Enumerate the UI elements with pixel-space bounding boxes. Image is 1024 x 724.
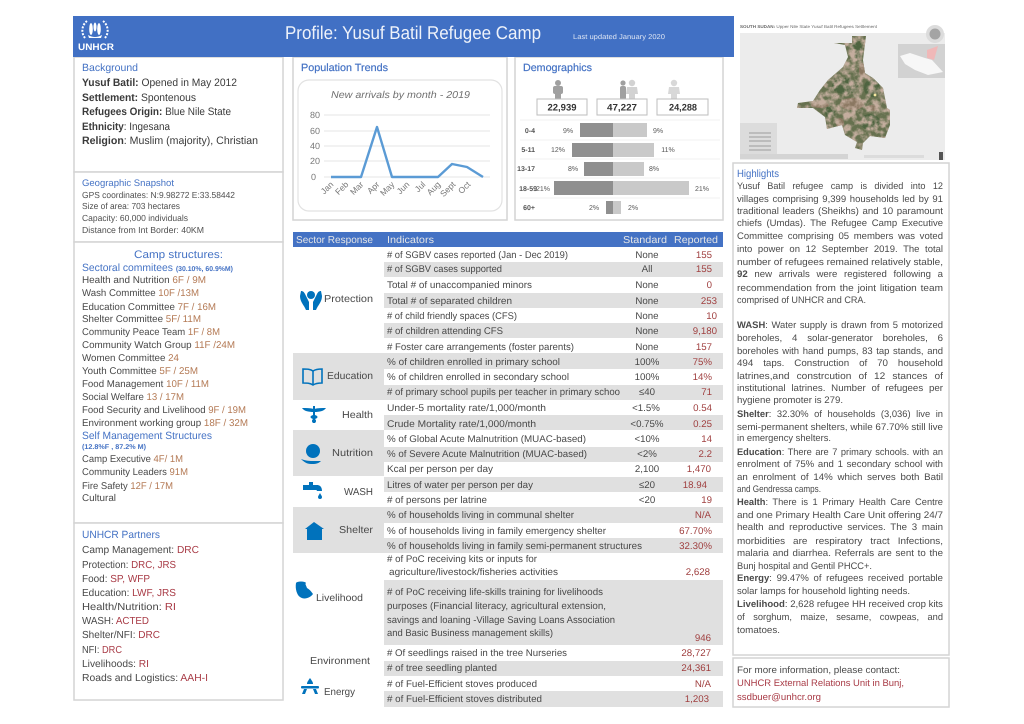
data line	[331, 127, 483, 177]
rows: nutrition: % of Global Acute Malnutrition (MUAC-based)	[387, 434, 586, 445]
rows: nutrition	[387, 434, 713, 475]
rows: livelihood: savings and loaning -Village Saving Loans Association	[387, 615, 615, 626]
text: overview: Yusuf Batil refugee camp is divided into 12	[737, 181, 943, 192]
rows: energy	[387, 679, 712, 705]
icon: male and female	[620, 80, 638, 100]
list: sectoral committees: Shelter Committee 5F/ 11M	[82, 314, 201, 325]
x axis labels: Feb	[333, 179, 351, 197]
last updated: Last updated January 2020	[573, 33, 665, 41]
text: overview: Committee comprising 05 members was voted	[737, 231, 943, 242]
rows: protection: Total # of separated children	[387, 296, 512, 307]
heading: sectoral committees: Sectoral commitees (30.10%, 60.9%M)	[82, 262, 233, 274]
text: camp facts: Yusuf Batil: Opened in May 2012	[82, 77, 237, 89]
rows: protection: # of SGBV cases reported (Jan - Dec 2019)	[387, 250, 568, 261]
icon: livelihood	[296, 582, 313, 598]
rows: protection: None	[635, 280, 659, 291]
text: livelihood	[737, 599, 943, 636]
rows: protection: # Foster care arrangements (foster parents)	[387, 342, 574, 353]
text: contact: ssdbuer@unhcr.org	[737, 692, 821, 703]
sector: education: Education	[327, 371, 373, 382]
text: wash: latrines,and constrcution of 12 stances of	[737, 371, 943, 382]
map: settlement location	[740, 24, 945, 160]
rows: protection: 9,180	[693, 326, 718, 337]
population pyramid	[517, 120, 720, 214]
population pyramid: 5-11	[521, 147, 535, 154]
rows: shelter: 32.30%	[679, 541, 712, 552]
rows: livelihood: # of PoC receiving kits or inputs for	[387, 554, 538, 565]
x axis labels: Apr	[365, 179, 382, 196]
rows: wash: # of persons per latrine	[387, 495, 487, 506]
text: energy: solar lamps for household lighting needs.	[737, 586, 910, 597]
rows: environment: # Of seedlings raised in the tree Nurseries	[387, 648, 567, 659]
text: overview	[737, 181, 944, 306]
rows: protection: None	[635, 250, 659, 261]
text: geographic facts: Distance from Int Border: 40KM	[82, 225, 204, 235]
rows: environment: # of tree seedling planted	[387, 663, 497, 674]
settlement satellite shape	[797, 36, 890, 150]
rows: livelihood	[387, 554, 711, 644]
sector: health	[302, 406, 373, 423]
population pyramid: 2%	[589, 205, 599, 212]
list: sectoral committees: Community Watch Group 11F /24M	[82, 340, 235, 351]
panel: UNHCR partners	[74, 523, 283, 700]
list: partners: Protection: DRC, JRS	[82, 560, 176, 571]
rows: protection: None	[635, 311, 659, 322]
text: overview: number of refugees remained relatively stable,	[737, 257, 943, 268]
title: Profile: Yusuf Batil Refugee Camp	[285, 22, 541, 43]
heading: self management structures	[82, 430, 212, 451]
text: overview: recommendation from the joint litigation team	[737, 283, 943, 294]
rows: nutrition: 1,470	[687, 464, 712, 475]
rows: shelter: 67.70%	[679, 526, 712, 537]
text: overview: villages comprising 9,399 households led by 91	[737, 194, 943, 205]
icon: nutrition	[301, 444, 321, 464]
text: health: Health: There is 1 Primary Health Care Centre	[737, 497, 943, 508]
icon: book	[303, 369, 322, 385]
list: sectoral committees: Social Welfare 13 / 17M	[82, 392, 184, 403]
population pyramid: 0-4	[525, 128, 535, 135]
panel: camp structures	[74, 242, 283, 523]
rows: shelter: % of households living in family emergency shelter	[387, 526, 607, 537]
rows: education: % of children enrolled in secondary school	[387, 372, 569, 383]
heading: highlights: Highlights	[737, 168, 779, 180]
rows: nutrition: Kcal per person per day	[387, 464, 493, 475]
sector: wash	[303, 482, 373, 499]
header banner	[73, 16, 734, 57]
table: sector response indicators	[293, 232, 723, 707]
text: geographic facts	[82, 190, 235, 235]
heading: demographics: Demographics	[523, 62, 592, 74]
rows: protection	[387, 250, 718, 353]
x axis labels: Oct	[456, 179, 473, 196]
list: sectoral committees: Wash Committee 10F /13M	[82, 288, 199, 299]
sector: nutrition	[301, 444, 373, 464]
sector: health: Health	[342, 410, 373, 421]
heading: camp structures: Camp structures:	[134, 249, 223, 261]
y axis labels: 60	[310, 126, 320, 136]
x axis labels: Jul	[413, 179, 427, 194]
text: health: morbidities are respiratory tract Infections,	[737, 536, 943, 547]
text: wash: institutional latrines. Number of refugees per	[737, 383, 943, 394]
rows: protection: Total # of unaccompanied minors	[387, 280, 532, 291]
population pyramid: 21%	[695, 186, 709, 193]
globe	[926, 25, 944, 43]
text: health: malaria and diarrhea. Referrals are sent to the	[737, 548, 943, 559]
rows: education: 71	[701, 387, 712, 398]
sector: livelihood: Livelihood	[316, 593, 363, 604]
sector: energy: Energy	[324, 687, 355, 698]
list: partners: Health/Nutrition: RI	[82, 602, 176, 613]
rows: health: Under-5 mortality rate/1,000/month	[387, 403, 546, 414]
population pyramid: 11%	[661, 147, 675, 154]
y axis labels: 20	[310, 156, 320, 166]
list: partners: Education: LWF, JRS	[82, 588, 176, 599]
text: energy: Energy: 99.47% of refugees received portable	[737, 573, 943, 584]
rows: wash: ≤20	[639, 480, 656, 491]
population pyramid: 9%	[653, 128, 663, 135]
rows: shelter: % of households living in communal shelter	[387, 510, 575, 521]
rows: protection: None	[635, 342, 659, 353]
text: education: an enrolment of 14% which serves both Batil	[737, 472, 943, 483]
rows: education	[387, 357, 712, 398]
table header: Reported	[674, 235, 718, 246]
list: self management structures: Cultural	[82, 493, 116, 504]
rows: environment: 24,361	[681, 663, 711, 674]
text: health	[737, 497, 943, 572]
rows: protection: 253	[701, 296, 717, 307]
x axis labels: Mar	[348, 179, 366, 197]
text: wash: boreholes with hand pumps, 83 tap stands, and	[737, 346, 943, 357]
population pyramid: 12%	[551, 147, 565, 154]
sector: environment: Environment	[310, 656, 370, 667]
text: livelihood: of sorghum, maize, sesame, cowpeas, and	[737, 612, 943, 623]
rows: livelihood: # of PoC receiving life-skills training for livelihoods	[387, 587, 603, 598]
rows: education: % of children enrolled in primary school	[387, 357, 560, 368]
panel: geographic snapshot	[74, 172, 283, 242]
icon: male	[553, 80, 563, 100]
list: partners	[82, 545, 208, 684]
text: education: enrolment of 75% and 1 secondary school with	[737, 459, 943, 470]
chart title: New arrivals by month - 2019	[331, 90, 470, 101]
x axis labels: Jan	[319, 179, 336, 196]
list: partners: WASH: ACTED	[82, 616, 149, 627]
rows: protection: None	[635, 296, 659, 307]
icon: stove	[301, 678, 319, 694]
rows: environment	[387, 648, 711, 674]
text: education: Education: There are 7 primary schools. with an	[737, 447, 943, 458]
text: overview: traditional leaders (Sheikhs) and 10 paramount	[737, 206, 943, 217]
text: wash	[737, 320, 943, 406]
text: health: health and reproductive services. The 3 main	[737, 522, 943, 533]
text: shelter: Shelter: 32.30% of households (3,036) live in	[737, 409, 943, 420]
list: partners: Food: SP, WFP	[82, 574, 150, 585]
list: self management structures	[82, 454, 188, 504]
map legend	[740, 123, 943, 160]
sector: education	[303, 369, 373, 385]
panel: demographics	[515, 57, 723, 220]
text: camp facts	[82, 77, 258, 147]
rows: livelihood: 2,628	[686, 567, 710, 578]
rows: protection: 157	[696, 342, 712, 353]
total boxes: 47,227	[607, 102, 637, 114]
x axis labels: Jun	[395, 179, 412, 196]
rows: health	[387, 403, 713, 430]
row shading	[293, 262, 723, 707]
list: sectoral committees: Community Peace Team 1F / 8M	[82, 327, 220, 338]
text: camp facts: Refugees Origin: Blue Nile State	[82, 106, 231, 118]
rows: protection: 0	[707, 280, 713, 291]
list: sectoral committees: Youth Committee 5F / 25M	[82, 366, 198, 377]
list: partners: NFI: DRC	[82, 645, 122, 656]
list: sectoral committees: Environment working group 18F / 32M	[82, 418, 248, 429]
text: wash: boreholes, 4 solar-generator boreholes, 6	[737, 333, 943, 344]
population pyramid: 8%	[649, 166, 659, 173]
rows: education: ≤40	[639, 387, 656, 398]
rows: health: <1.5%	[632, 403, 660, 414]
x axis labels: Sept	[438, 179, 458, 199]
text: energy	[737, 573, 943, 597]
population pyramid: 2%	[628, 205, 638, 212]
total boxes: 24,288	[669, 102, 697, 114]
text: education: and Gendressa camps.	[737, 484, 821, 495]
rows: wash	[387, 480, 712, 506]
rows: livelihood: and Basic Business management skills)	[387, 628, 553, 639]
list: self management structures: Camp Executive 4F/ 1M	[82, 454, 183, 465]
line chart: new arrivals by month	[298, 80, 502, 211]
total boxes	[537, 99, 708, 115]
heading: self management structures: (12.8%F , 87.2% M)	[82, 443, 146, 451]
list: sectoral committees	[82, 275, 248, 429]
inset locator map	[898, 44, 945, 78]
rows: environment: 28,727	[681, 648, 711, 659]
rows: protection: None	[635, 326, 659, 337]
rows: nutrition: % of Severe Acute Malnutrition (MUAC-based)	[387, 449, 587, 460]
text: overview: chiefs (Umdas). The Refugee Camp Executive	[737, 218, 943, 229]
logo: UNHCR	[78, 21, 114, 53]
rows: nutrition: 2.2	[699, 449, 712, 460]
list: sectoral committees: Health and Nutrition 6F / 9M	[82, 275, 206, 286]
rows: nutrition: 2,100	[635, 464, 660, 475]
list: self management structures: Fire Safety 12F / 17M	[82, 481, 173, 492]
sector: wash: WASH	[344, 487, 373, 498]
heading: geographic snapshot: Geographic Snapshot	[82, 178, 174, 189]
x axis labels: May	[378, 179, 397, 198]
rows: wash: 19	[701, 495, 712, 506]
rows: education: 75%	[693, 357, 712, 368]
text: geographic facts: GPS coordinates: N:9.98272 E:33.58442	[82, 190, 235, 200]
list: partners: Camp Management: DRC	[82, 545, 199, 556]
rows: health: 0.25	[693, 419, 712, 430]
y axis labels	[310, 110, 320, 182]
text: health: Bunj hospital and Gentil PHCC+.	[737, 561, 872, 572]
rows: education: 100%	[635, 372, 660, 383]
icon: caduceus	[302, 406, 326, 423]
map title: SOUTH SUDAN: Upper Nile State Yusuf Batil Refugees Settlement	[740, 24, 878, 29]
list: sectoral committees: Food Security and Livelihood 9F / 19M	[82, 405, 246, 416]
rows: livelihood: agriculture/livestock/fisheries activities	[389, 567, 558, 578]
camp marker	[874, 94, 876, 96]
list: sectoral committees: Food Management 10F / 11M	[82, 379, 209, 390]
sector: shelter	[305, 522, 374, 540]
rows: health: <0.75%	[630, 419, 664, 430]
heading: UNHCR partners: UNHCR Partners	[82, 529, 160, 541]
text: contact: For more information, please contact:	[737, 665, 900, 676]
table header: Sector Response	[296, 235, 373, 246]
population pyramid: 9%	[563, 128, 573, 135]
sector: livelihood	[296, 582, 363, 604]
population pyramid: 13-17	[517, 166, 535, 173]
text: overview: into power on 12 September 2019. The total	[737, 244, 943, 255]
x axis labels	[319, 179, 473, 199]
y axis labels: 40	[310, 141, 320, 151]
rows: protection: All	[642, 264, 652, 275]
rows: protection: 155	[696, 250, 712, 261]
y axis labels: 0	[311, 172, 316, 182]
text: wash: 494 taps. Construction of 70 household	[737, 358, 943, 369]
population pyramid: 21%	[536, 186, 550, 193]
text: camp facts: Settlement: Spontenous	[82, 92, 197, 104]
rows: livelihood: purposes (Financial literacy, agricultural extension,	[387, 601, 606, 612]
rows: shelter: N/A	[695, 510, 712, 521]
rows: education: 14%	[693, 372, 712, 383]
rows: wash: <20	[639, 495, 656, 506]
text: camp facts: Religion: Muslim (majority), Christian	[82, 135, 258, 147]
rows: protection: 155	[696, 264, 712, 275]
panel: contact	[733, 658, 949, 707]
text: wash: WASH: Water supply is drawn from 5 motorized	[737, 320, 943, 331]
sector: protection	[300, 291, 373, 310]
rows: wash: 18.94	[683, 480, 708, 491]
population pyramid: 60+	[523, 205, 535, 212]
rows: shelter: % of households living in family semi-permanent structures	[387, 541, 642, 552]
logo: UNHCR: UNHCR	[78, 42, 114, 53]
table header	[293, 232, 723, 247]
rows: wash: Litres of water per person per day	[387, 480, 533, 491]
text: livelihood: tomatoes.	[737, 625, 780, 636]
rows: nutrition: <2%	[637, 449, 657, 460]
y axis labels: 80	[310, 110, 320, 120]
text: shelter: semi-permanent shelters, while 67.70% still live	[737, 422, 943, 433]
text: wash: hygiene promoter is 279.	[737, 395, 843, 406]
text: contact: UNHCR External Relations Unit in Bunj,	[737, 678, 904, 689]
rows: health: Crude Mortality rate/1,000/month	[387, 419, 536, 430]
list: partners: Shelter/NFI: DRC	[82, 630, 160, 641]
text: shelter	[737, 409, 943, 444]
rows: livelihood: 946	[695, 633, 711, 644]
x axis labels: Aug	[425, 179, 443, 197]
rows: protection: # of children attending CFS	[387, 326, 504, 337]
panel: highlights	[733, 163, 949, 655]
text: overview: comprised of UNHCR and CRA.	[737, 295, 866, 306]
heading: background: Background	[82, 62, 138, 74]
heading: self management structures: Self Management Structures	[82, 430, 212, 442]
list: sectoral committees: Education Committee 7F / 16M	[82, 302, 216, 313]
list: self management structures: Community Leaders 91M	[82, 467, 188, 478]
rows: health: 0.54	[693, 403, 713, 414]
rows: education: 100%	[635, 357, 660, 368]
rows: shelter	[387, 510, 712, 552]
text: contact	[737, 665, 904, 703]
icon: water tap	[303, 482, 322, 499]
list: partners: Roads and Logistics: AAH-I	[82, 673, 208, 684]
rows: energy: # of Fuel-Efficient stoves distributed	[387, 694, 542, 705]
list: partners: Livelihoods: RI	[82, 659, 149, 670]
rows: protection: # of child friendly spaces (CFS)	[387, 311, 517, 322]
text: geographic facts: Size of area: 703 hectares	[82, 201, 181, 211]
heading: population trends: Population Trends	[301, 62, 388, 74]
text: health: and one Primary Health Care Unit offering 24/7	[737, 510, 943, 521]
rows: protection: # of SGBV cases supported	[387, 264, 502, 275]
population pyramid: 8%	[568, 166, 578, 173]
text: overview: 92 new arrivals were registered following a	[737, 269, 944, 280]
list: sectoral committees: Women Committee 24	[82, 353, 180, 364]
panel: background	[74, 57, 283, 172]
sector: protection: Protection	[324, 294, 373, 305]
rows: nutrition: 14	[701, 434, 713, 445]
text: livelihood: Livelihood: 2,628 refugee HH received crop kits	[737, 599, 943, 610]
sector: shelter: Shelter	[339, 525, 374, 536]
rows: energy: N/A	[695, 679, 712, 690]
panel: population trends	[293, 57, 507, 220]
total boxes: 22,939	[548, 102, 576, 114]
sector: energy	[301, 678, 355, 698]
table header: Indicators	[387, 235, 434, 246]
rows: nutrition: <10%	[634, 434, 660, 445]
rows: protection: 10	[706, 311, 718, 322]
rows: education: # of primary school pupils per teacher in primary schoo	[387, 387, 620, 398]
table header: Standard	[623, 235, 667, 246]
rows: energy: # of Fuel-Efficient stoves produced	[387, 679, 537, 690]
text: camp facts: Ethnicity: Ingesana	[82, 121, 170, 133]
icon: house	[305, 522, 324, 540]
icon: protection	[300, 291, 322, 310]
icon: female	[668, 80, 680, 100]
population pyramid: 18-59	[519, 186, 537, 193]
text: education	[737, 447, 943, 495]
rows: energy: 1,203	[685, 694, 709, 705]
text: shelter: in emergency shelters.	[737, 433, 831, 444]
text: geographic facts: Capacity: 60,000 individuals	[82, 213, 189, 223]
sector: nutrition: Nutrition	[332, 448, 373, 459]
